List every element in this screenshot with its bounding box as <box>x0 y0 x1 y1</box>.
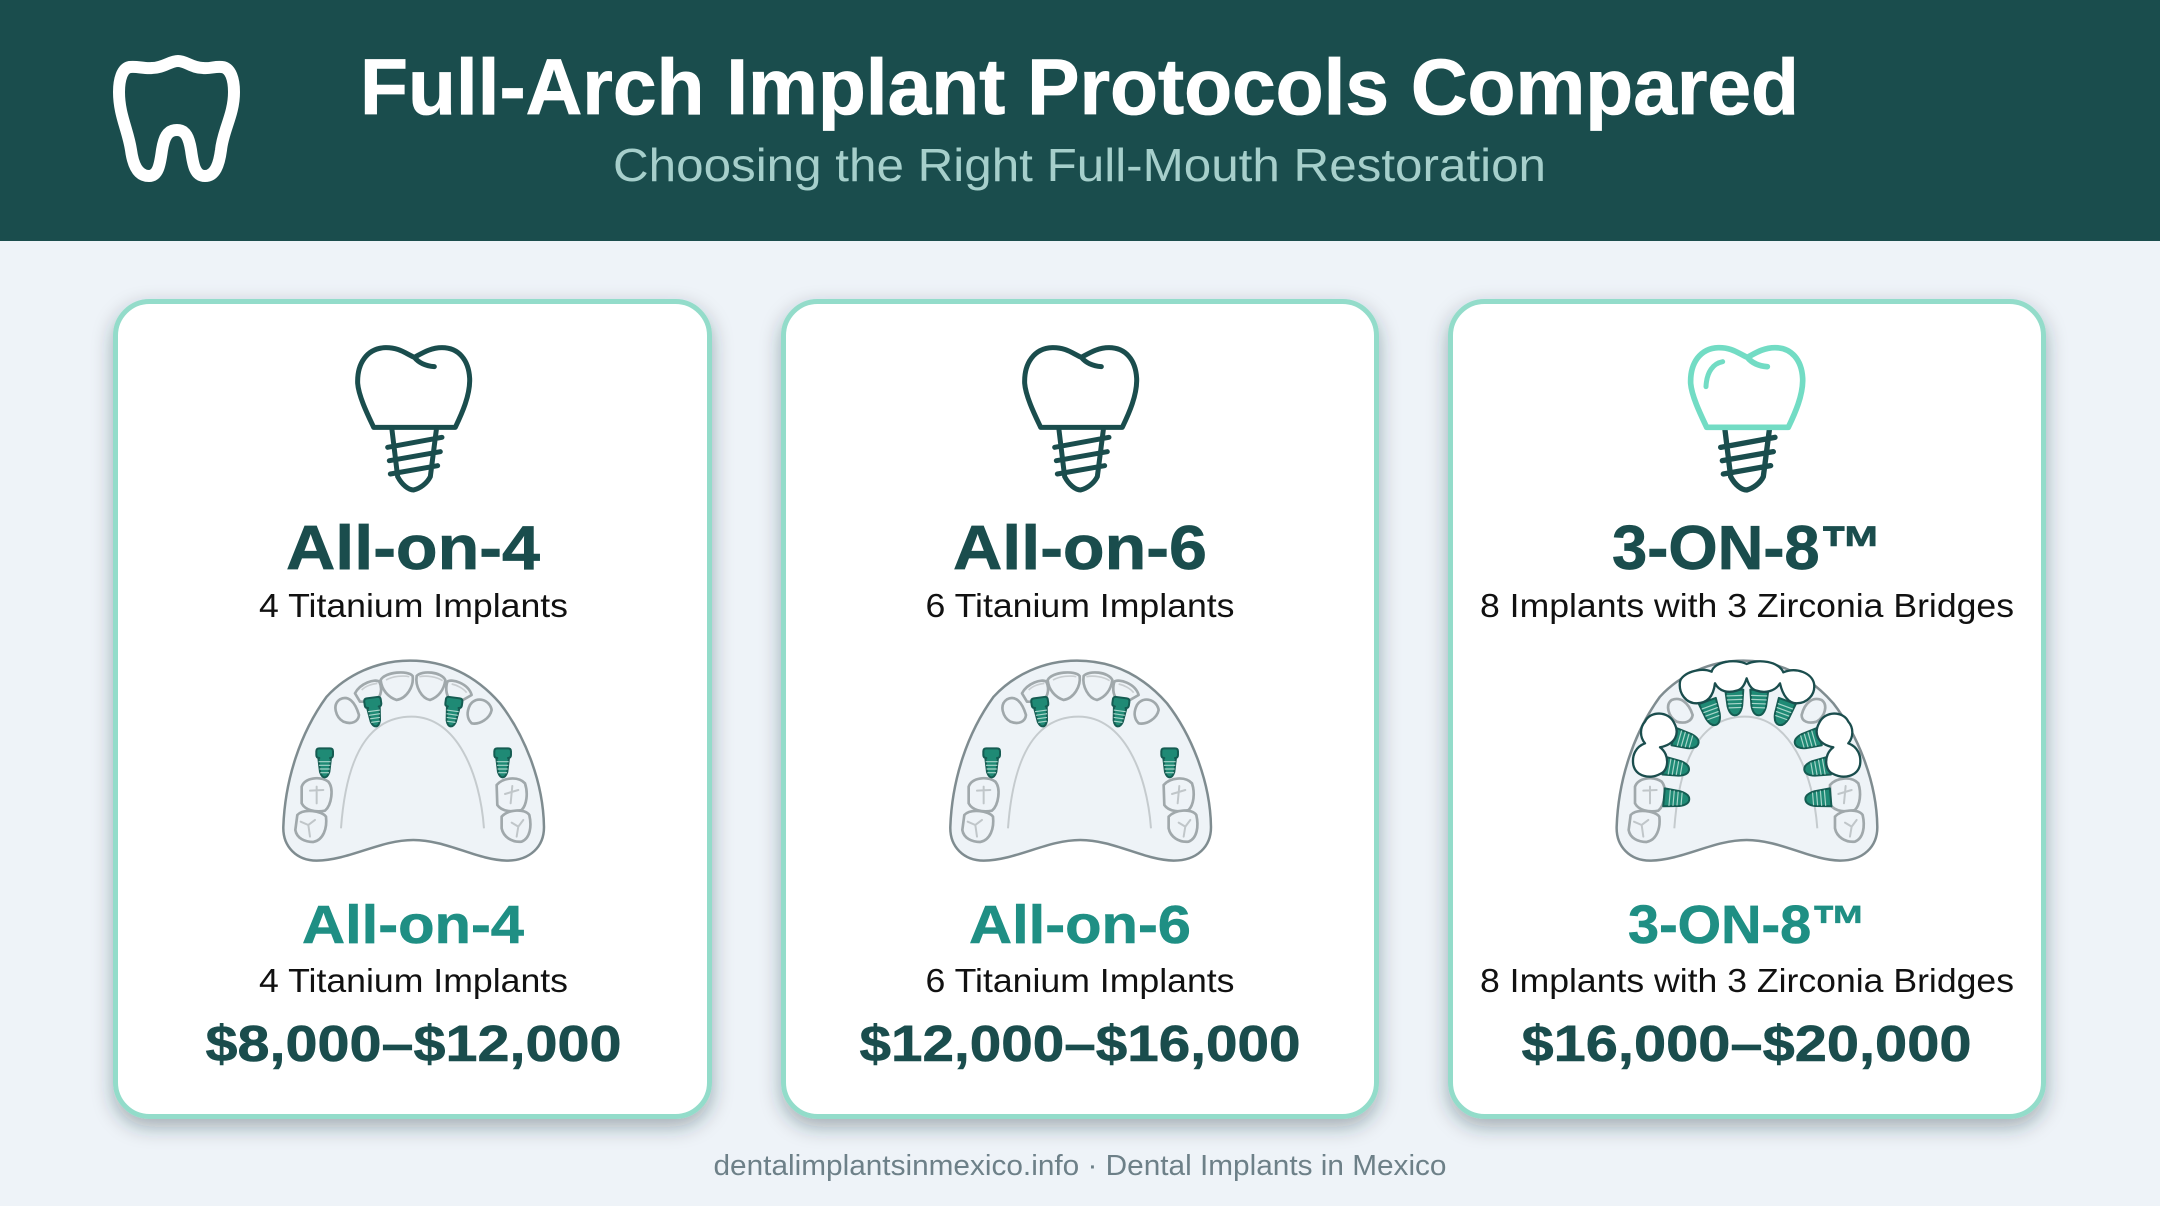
header band <box>0 0 2160 241</box>
card heading: 3-ON-8™ <box>1612 514 1883 583</box>
arch diagram: six implants <box>950 661 1211 861</box>
card description: 8 Implants with 3 Zirconia Bridges <box>1480 587 2014 624</box>
protocol description: 4 Titanium Implants <box>259 962 568 999</box>
protocol name: 3-ON-8™ <box>1628 895 1867 955</box>
card heading: All-on-4 <box>286 514 541 583</box>
title: Full-Arch Implant Protocols Compared <box>360 42 1799 131</box>
subtitle: Choosing the Right Full-Mouth Restoration <box>613 139 1546 191</box>
panel: All-on-4 <box>116 302 710 1116</box>
panel: All-on-6 <box>784 302 1376 1116</box>
footer: dentalimplantsinmexico.info · Dental Implants in Mexico <box>714 1150 1446 1182</box>
arch diagram: eight implants with bridges <box>1617 661 1877 861</box>
card description: 4 Titanium Implants <box>259 587 568 624</box>
price: $8,000–$12,000 <box>206 1015 622 1072</box>
price: $16,000–$20,000 <box>1522 1015 1972 1072</box>
implants <box>1662 690 1831 808</box>
icon: implant crown mint <box>1691 348 1803 490</box>
card description: 6 Titanium Implants <box>926 587 1234 624</box>
protocol name: All-on-6 <box>969 895 1191 955</box>
protocol description: 6 Titanium Implants <box>926 962 1234 999</box>
icon: implant crown <box>1025 348 1137 490</box>
icon: tooth <box>119 61 234 176</box>
zirconia bridges <box>1633 661 1860 777</box>
panel: 3-ON-8 <box>1450 302 2044 1116</box>
card heading: All-on-6 <box>953 514 1207 583</box>
protocol description: 8 Implants with 3 Zirconia Bridges <box>1480 962 2014 999</box>
arch diagram: four implants <box>283 661 544 861</box>
icon: implant crown <box>358 348 470 490</box>
protocol name: All-on-4 <box>302 895 524 955</box>
price: $12,000–$16,000 <box>860 1015 1300 1072</box>
